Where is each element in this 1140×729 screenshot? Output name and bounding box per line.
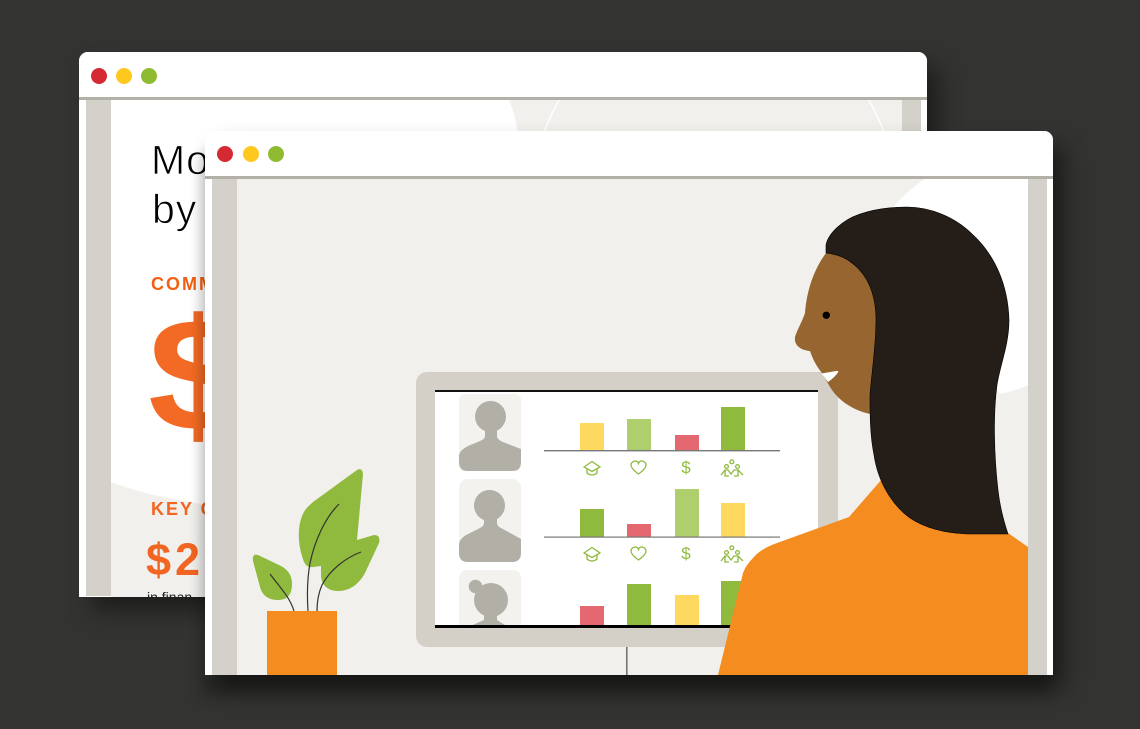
profile row 2 bbox=[459, 479, 780, 563]
bar chart row 2 bbox=[544, 489, 780, 538]
person face bbox=[795, 253, 885, 414]
person eye bbox=[823, 312, 830, 319]
avatar 3 bbox=[459, 570, 521, 625]
person body bbox=[718, 470, 1028, 675]
avatar 1 bbox=[459, 394, 521, 471]
icons row 2 bbox=[584, 546, 743, 562]
plant bbox=[253, 469, 379, 675]
person smile bbox=[822, 371, 838, 382]
front browser window bbox=[205, 131, 1053, 675]
monitor bbox=[416, 372, 838, 647]
profile row 1 bbox=[459, 394, 780, 477]
heading text: Mo bbox=[151, 137, 210, 183]
person hair bbox=[826, 207, 1009, 534]
key label: KEY C bbox=[151, 499, 216, 519]
front window side strips bbox=[212, 179, 1047, 675]
front window title bar bbox=[205, 131, 1053, 179]
dollar icon row 2: $ bbox=[681, 544, 691, 563]
icons row 1 bbox=[584, 460, 743, 476]
back window title bar bbox=[79, 52, 927, 100]
person bbox=[718, 207, 1028, 675]
key figure: $2 bbox=[146, 534, 204, 585]
big dollar figure: $ bbox=[148, 285, 248, 464]
back browser window bbox=[79, 52, 927, 597]
avatar 2 bbox=[459, 479, 521, 562]
profile row 3 bbox=[459, 570, 745, 626]
bar chart row 1 bbox=[544, 407, 780, 451]
commitment label: COMM bbox=[151, 274, 216, 294]
heading text bbox=[151, 137, 210, 232]
heading text: by bbox=[152, 186, 197, 232]
plant stems bbox=[270, 504, 361, 611]
front window page background bbox=[205, 179, 1053, 675]
plant pot bbox=[267, 611, 337, 675]
back window side strips bbox=[86, 100, 921, 596]
bar chart row 3 bbox=[580, 581, 745, 626]
plant leaves bbox=[253, 469, 379, 600]
monitor stand bbox=[626, 647, 628, 675]
dollar icon row 1: $ bbox=[681, 458, 691, 477]
back window page background shapes bbox=[79, 12, 927, 597]
